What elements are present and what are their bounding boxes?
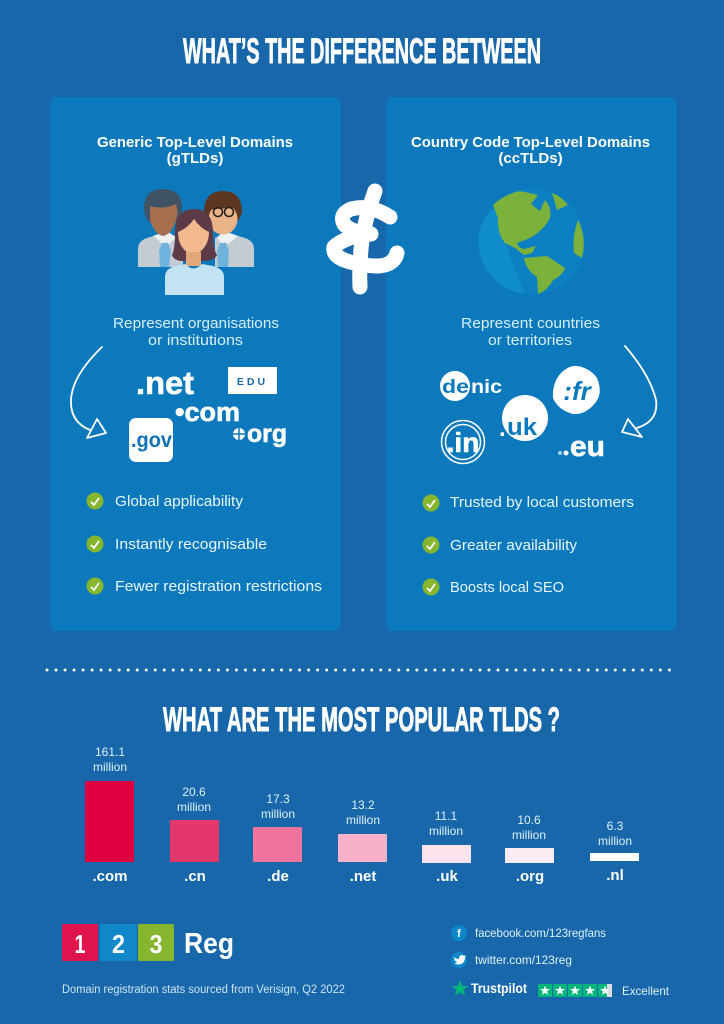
logos: country domains: uk <box>507 414 538 441</box>
bar: .com <box>85 745 134 885</box>
panel: gTLDs <box>50 97 341 631</box>
benefits list <box>86 492 322 595</box>
benefits list: Instantly recognisable <box>115 536 267 553</box>
bar: .net: million <box>346 813 380 827</box>
bar: .net: 13.2 <box>351 798 375 812</box>
logos: country domains <box>440 366 605 464</box>
logos: generic domains: .gov <box>131 429 172 452</box>
benefits list <box>422 494 634 596</box>
bar: .nl: 6.3 <box>607 819 624 833</box>
bar: .uk: .uk <box>436 868 458 885</box>
bar chart <box>85 745 639 885</box>
bar: .cn <box>170 785 219 885</box>
trustpilot rating <box>452 980 670 998</box>
description: Represent organisations <box>113 315 279 332</box>
benefits list: Trusted by local customers <box>450 494 634 511</box>
heading: gTLDs: (gTLDs) <box>167 150 223 167</box>
logo: 123 Reg: Reg <box>184 928 234 960</box>
dotted divider <box>47 668 670 672</box>
panel: ccTLDs <box>386 97 677 631</box>
bar: .nl <box>590 819 639 884</box>
description: or institutions <box>148 332 243 349</box>
social: facebook: f <box>457 928 461 940</box>
arrow <box>71 347 106 438</box>
logo: 123 Reg: 3 <box>150 929 162 959</box>
bar: .uk: 11.1 <box>435 809 458 823</box>
description <box>113 315 279 349</box>
icon: globe <box>478 188 584 294</box>
bar: .com: .com <box>92 868 128 885</box>
description: Represent countries <box>461 315 600 332</box>
bar: .nl: million <box>598 834 632 848</box>
bar: .de: 17.3 <box>266 792 290 806</box>
bar: .org <box>505 813 554 885</box>
bar: .com: million <box>93 760 127 774</box>
logos: generic domains: org <box>247 420 287 448</box>
logos: country domains: .in <box>447 427 479 458</box>
logo: 123 Reg: 1 <box>74 929 86 959</box>
bar: .uk: million <box>429 824 463 838</box>
bar: .net: .net <box>350 868 376 885</box>
bar: .org: .org <box>516 868 544 885</box>
bar: .de: .de <box>267 868 289 885</box>
logos: country domains: de <box>442 377 469 398</box>
logos: generic domains: •com <box>175 397 240 427</box>
description <box>461 315 600 349</box>
benefits list: Fewer registration restrictions <box>115 578 322 595</box>
social: facebook: facebook.com/123regfans <box>475 926 606 940</box>
social: twitter <box>451 952 572 968</box>
bar: .de <box>253 792 302 885</box>
bar: .org: 10.6 <box>517 813 541 827</box>
logos: generic domains <box>129 365 287 462</box>
heading: ccTLDs <box>411 134 650 167</box>
logo: 123 Reg <box>62 924 234 961</box>
benefits list: Greater availability <box>450 537 578 554</box>
bar: .cn: million <box>177 800 211 814</box>
description: or territories <box>488 332 572 349</box>
bar: .com: 161.1 <box>95 745 125 759</box>
heading: ccTLDs: Country Code Top-Level Domains <box>411 134 650 151</box>
logo: 123 Reg: 2 <box>112 929 125 959</box>
bar: .uk <box>422 809 471 885</box>
heading: gTLDs <box>97 134 293 167</box>
logos: country domains: . <box>499 415 506 442</box>
logos: country domains: eu <box>570 431 605 463</box>
trustpilot rating: Trustpilot <box>471 980 527 996</box>
bar: .org: million <box>512 828 546 842</box>
source note: Domain registration stats sourced from Verisign, Q2 2022 <box>62 984 345 996</box>
logos: generic domains: .net <box>136 365 194 401</box>
logos: country domains: nic <box>471 377 502 398</box>
benefits list: Boosts local SEO <box>450 579 564 596</box>
logos: country domains: :fr <box>563 376 593 406</box>
bar: .cn: 20.6 <box>182 785 206 799</box>
heading: ccTLDs: (ccTLDs) <box>498 150 563 167</box>
trustpilot rating: Excellent <box>622 984 670 998</box>
heading: gTLDs: Generic Top-Level Domains <box>97 134 293 151</box>
icon: ampersand <box>334 191 397 287</box>
bar: .net <box>338 798 387 885</box>
bar: .nl: .nl <box>606 867 624 884</box>
bar: .de: million <box>261 807 295 821</box>
benefits list: Global applicability <box>115 493 244 510</box>
icon: people <box>138 189 254 295</box>
arrow <box>622 346 656 437</box>
social: twitter: twitter.com/123reg <box>475 953 572 967</box>
bar: .cn: .cn <box>184 868 206 885</box>
logos: generic domains: EDU <box>237 376 268 388</box>
